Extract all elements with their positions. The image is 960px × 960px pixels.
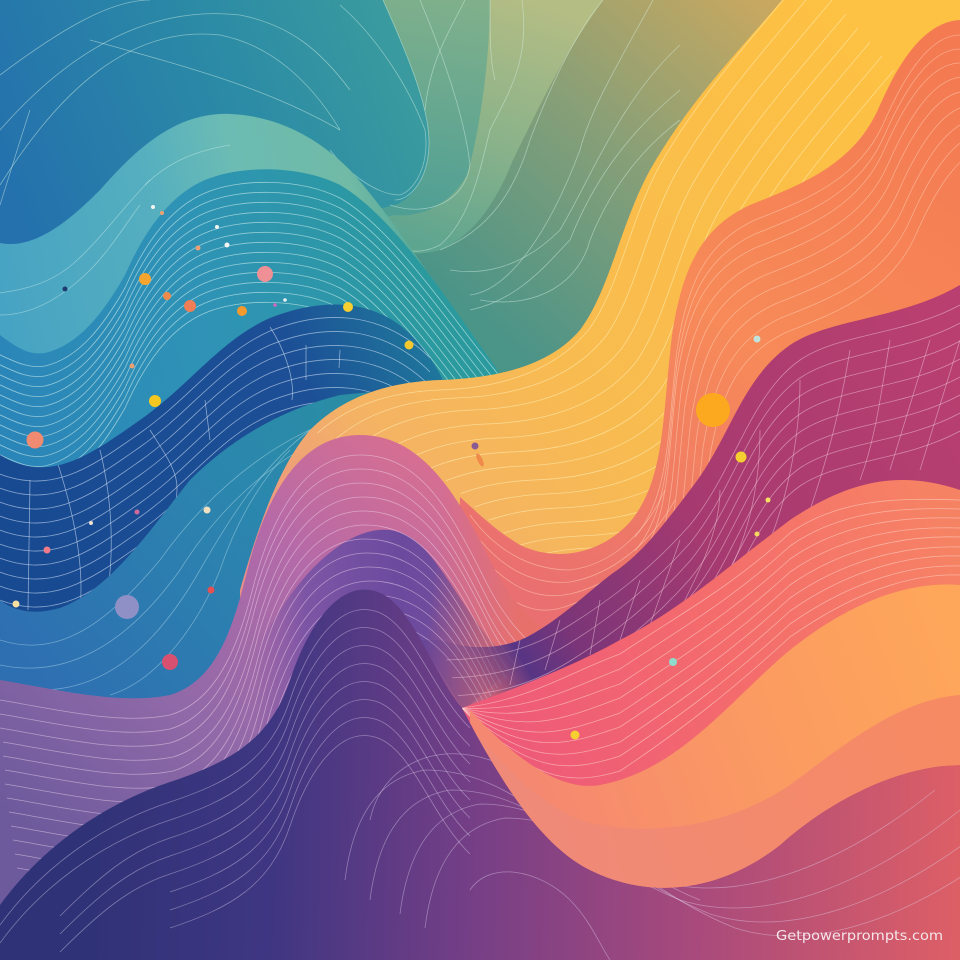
band: pink coral wave bbox=[462, 480, 960, 888]
indigo contour lines bbox=[0, 610, 960, 960]
band: orange wave bbox=[460, 20, 960, 698]
band: blue wave with contour lines bbox=[0, 169, 500, 550]
salmon blend on mauve tip bbox=[0, 435, 545, 960]
band: lower blue wave bbox=[0, 379, 456, 698]
band: yellow wave bbox=[240, 0, 960, 598]
band: mauve wave bbox=[0, 435, 542, 905]
base: indigo to coral gradient bbox=[0, 590, 960, 960]
band: navy wave bbox=[0, 304, 445, 612]
contour lines: top area bbox=[0, 0, 680, 310]
band: salmon wave bbox=[473, 695, 960, 888]
magenta net lines bbox=[446, 304, 960, 696]
pink contour lines bbox=[462, 499, 960, 778]
yellow contour lines bbox=[317, 0, 894, 553]
green ribbon bbox=[0, 0, 490, 300]
inner purple hill bbox=[265, 530, 496, 720]
band: light orange wave bbox=[470, 584, 960, 888]
mauve contour lines bbox=[0, 454, 526, 870]
band: magenta wave bbox=[428, 285, 960, 708]
blue contour lines bbox=[0, 182, 498, 467]
watermark: Getpowerprompts.com bbox=[776, 929, 943, 944]
light green ribbon bbox=[0, 0, 603, 300]
scattered dots bbox=[12, 205, 770, 740]
lower blue contour lines bbox=[0, 428, 312, 696]
orange contour lines bbox=[470, 35, 960, 649]
teal band contour lines bbox=[0, 145, 230, 315]
band: teal wave bbox=[0, 114, 505, 960]
background: olive to green upper area bbox=[0, 0, 960, 460]
navy grid lines bbox=[0, 317, 430, 610]
dark teal lobe bbox=[0, 0, 429, 300]
